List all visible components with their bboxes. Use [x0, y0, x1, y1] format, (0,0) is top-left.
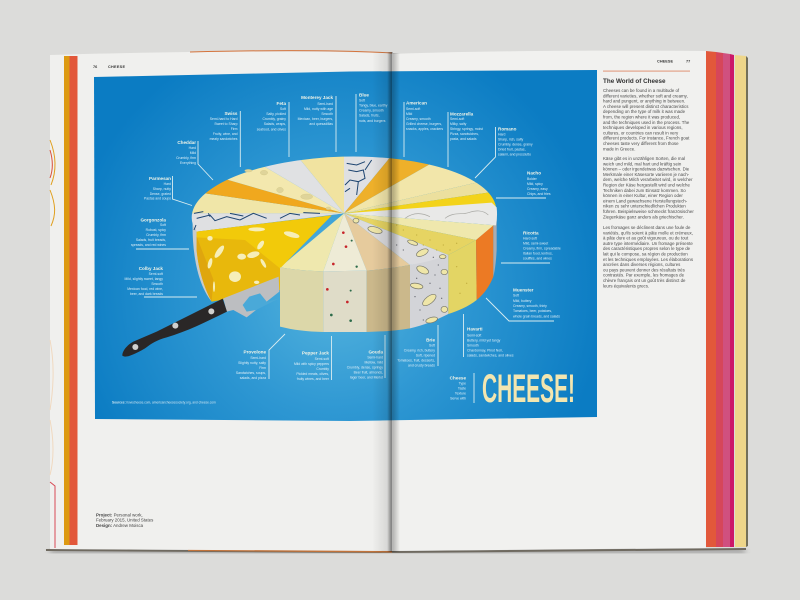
- label: Swiss: meaty sandwiches: [210, 137, 238, 141]
- label: Swiss: Firm: [231, 127, 238, 131]
- article text: French: contrastés. Par exemple, les fromages de: [603, 273, 685, 278]
- article text: German: Region der Käse hergestellt wird und welche: [603, 182, 690, 188]
- article text: French: autre type intermédiaire. Un fromage présente: [603, 241, 693, 246]
- article text: French: chèvre français ont un goût très distinct de: [603, 278, 686, 283]
- label: American: Creamy, smooth: [406, 117, 431, 121]
- label: Gouda: Crumbly, dense, springy: [347, 366, 383, 370]
- label: American: Semi-soft: [406, 107, 420, 111]
- label: Swiss: Swiss: [224, 111, 238, 116]
- label: Ricotta: Mild, semi-sweet: [523, 242, 548, 246]
- side faces: [410, 217, 497, 328]
- label: Mozzarella: Stringy, springy, moist: [450, 127, 483, 131]
- label: Mozzarella: pasta, and salads: [450, 137, 477, 141]
- yellow wedge: [197, 215, 332, 302]
- label: Colby Jack: Mild, slightly sweet, tangy: [125, 277, 163, 281]
- headline CHEESE!: CHEESE!: [482, 367, 575, 411]
- article text: English: depending on the type of milk it was made: [603, 109, 686, 114]
- label: Cheddar: [176, 140, 213, 180]
- label: Nacho: Nacho: [527, 170, 541, 176]
- book edge: bottom: [46, 548, 746, 553]
- label: Colby Jack: [125, 266, 197, 297]
- brie ovals and speckles: [353, 218, 448, 324]
- label: Brie: and crusty breads: [408, 364, 435, 368]
- label: Parmesan: Sharp, nutty: [153, 187, 171, 191]
- label: Cheddar: Mild: [190, 151, 196, 155]
- label: Nacho: Bolder: [527, 177, 538, 181]
- label: Mozzarella: Pizza, sandwiches,: [450, 132, 479, 136]
- legend: Cheese key: Taste: [458, 386, 466, 390]
- article text: German: können in einer Kultur, einer Region oder: [603, 193, 683, 198]
- article text: French: lait qui le compose, sa région de production: [603, 252, 688, 256]
- label: Muenster: Muenster: [513, 288, 534, 292]
- label: Swiss: Semi-hard to Hard: [210, 117, 238, 121]
- label: Feta: Feta: [277, 101, 286, 106]
- article text: English: Cheeses can be found in a multitude of: [603, 88, 680, 93]
- label: Gouda: lager beer, and Merlot: [350, 376, 383, 380]
- article text: English: cheeses taste very different from those: [603, 141, 679, 146]
- swiss holes: [245, 169, 331, 210]
- label: Feta: Crumbly, grainy: [262, 117, 286, 121]
- grey squiggles: [405, 211, 488, 218]
- label: Havarti: Semi-soft: [467, 334, 481, 338]
- left page: [50, 52, 392, 551]
- article text: French: et les techniques employées. Les élaborations: [603, 257, 694, 262]
- label: Romano: Crumbly, dense, grainy: [498, 142, 533, 146]
- label: Swiss: Fruity, wine, and: [213, 132, 238, 136]
- running head left: [93, 65, 125, 69]
- article text: German: Ziegenkäse ganz anders als griechischer.: [603, 214, 684, 219]
- legend: Cheese key: Cheese: [450, 376, 466, 380]
- article text: French: leurs équivalents grecs.: [603, 283, 649, 288]
- article text: English: and the techniques used in the process. The: [603, 120, 690, 125]
- left rind: [193, 218, 213, 302]
- project credits: Andrew Moisca: [112, 523, 144, 528]
- label: Colby Jack: Smooth: [151, 282, 163, 286]
- label: American: Grilled cheese, burgers,: [406, 122, 442, 126]
- article text: German: niken zu sehr unterschiedlichen Produkten: [603, 204, 686, 209]
- blade cutouts: [243, 293, 279, 312]
- label: Feta: [257, 101, 289, 157]
- label: Colby Jack: Mexican food, red wine,: [127, 287, 163, 291]
- label: Brie: Brie: [426, 338, 435, 342]
- label: Feta: Salads, wraps,: [264, 122, 286, 126]
- blue veins: [194, 160, 372, 230]
- left page edge decoration: [50, 140, 55, 548]
- label: Gouda: [347, 335, 385, 380]
- label: Provolone: Firm: [259, 366, 266, 370]
- article text: English: cultures, or countries can result in very: [603, 130, 679, 135]
- label: Parmesan: Dense, grated: [150, 192, 171, 196]
- label: Mozzarella: Semi-soft: [450, 117, 464, 121]
- article text: French: Les fromages se déclinent dans une foule de: [603, 225, 691, 230]
- article text: English: A cheese will present distinct characteristics: [603, 104, 689, 109]
- label: Muenster: Tomatoes, beer, potatoes,: [513, 309, 552, 313]
- article text: German: führen. Beispielsweise schmeckt französischer: [603, 209, 694, 214]
- label: Brie: Soft: [429, 344, 435, 348]
- label: American: [404, 100, 443, 157]
- label: Blue: Salads, fruits,: [359, 114, 380, 118]
- label: Romano: salami, and prosciutto: [498, 152, 531, 156]
- label: Mozzarella: Milky, salty: [450, 122, 467, 126]
- article text: German: dem, welche Milch verarbeitet wird, in welcher: [603, 177, 693, 182]
- label: Romano: Hard: [498, 132, 505, 136]
- label: Ricotta: Creamy, firm, spreadable: [523, 246, 561, 250]
- label: Nacho: Creamy, easy: [527, 187, 548, 191]
- spine shadow left: [372, 52, 393, 552]
- label: American: Mild: [406, 112, 412, 116]
- label: Gorgonzola: Soft: [160, 223, 166, 227]
- book shadow: [50, 549, 745, 553]
- project credits: February 2015, United States: [96, 518, 154, 522]
- cheese wheel: [147, 140, 542, 332]
- label: Muenster: Soft: [513, 294, 519, 298]
- label: Cheddar: Crumbly, firm: [176, 156, 196, 160]
- label: Gouda: Semi-hard: [367, 356, 383, 360]
- label: Mozzarella: Mozzarella: [450, 112, 474, 116]
- label: Gorgonzola: Gorgonzola: [140, 218, 166, 222]
- pepper flecks: [326, 231, 349, 303]
- article text: German: einem Land gewachsene Herstellungstech-: [603, 198, 688, 203]
- label: Muenster: Mild, buttery: [513, 299, 532, 303]
- label: Monterey Jack: Smooth: [321, 112, 333, 116]
- label: Ricotta: Italian food, lentros,: [523, 252, 553, 256]
- label: Blue: [356, 92, 388, 152]
- label: Nacho: [496, 170, 551, 198]
- label: Monterey Jack: Mexican, beer, burgers,: [298, 117, 333, 121]
- label: Provolone: Semi-hard: [250, 356, 266, 360]
- article text: French: à pâte dure et au goût vigoureux, ou de tout: [603, 236, 689, 241]
- top edge accent: [190, 51, 392, 53]
- front right top slices: [280, 203, 497, 271]
- legend: Cheese key: [450, 373, 474, 403]
- label: Cheddar: Cheddar: [177, 140, 196, 145]
- label: Ricotta: [501, 230, 561, 263]
- article rule: [603, 70, 690, 72]
- legend: Cheese key: Serve with: [450, 396, 466, 400]
- article text: French: ancrées dans diverses régions, cultures: [603, 262, 681, 267]
- article text: English: hard and pungent, or anything in between.: [603, 99, 685, 104]
- label: Pepper Jack: Mild with spicy peppers: [294, 362, 329, 366]
- label: Havarti: [464, 314, 514, 358]
- label: Brie: Soft, ripened: [416, 354, 435, 358]
- label: Brie: Creamy, rich, buttery: [404, 348, 435, 352]
- running head right: [657, 60, 690, 64]
- label: Blue: Creamy, smooth: [359, 108, 384, 112]
- front wedge faces: [280, 265, 410, 332]
- label: Colby Jack: beer, and dark breads: [130, 292, 163, 296]
- label: Cheddar: Everything: [180, 161, 196, 165]
- rivets: [132, 308, 214, 350]
- knife: [122, 277, 279, 357]
- left page colour stripes: [64, 56, 78, 545]
- label: Colby Jack: Colby Jack: [139, 266, 163, 271]
- label: Blue: nuts, and burgers: [359, 119, 386, 123]
- label: Pepper Jack: [294, 336, 332, 381]
- article text: French: variétés, qu'ils soient à pâte molle et crémeux,: [603, 230, 693, 235]
- label: Monterey Jack: Semi-hard: [317, 102, 333, 106]
- project credits: Personal work,: [112, 512, 143, 518]
- right page: [392, 51, 706, 551]
- label: Pepper Jack: Crumbly: [316, 367, 329, 371]
- label: Feta: Salty, pickled: [266, 112, 286, 116]
- label: Pepper Jack: Pepper Jack: [302, 350, 329, 356]
- label: Provolone: Provolone: [244, 350, 266, 354]
- blade: [223, 277, 279, 317]
- label: Ricotta: Hard-soft: [523, 236, 537, 240]
- spine shadow right: [393, 53, 400, 552]
- label: Nacho: Mild, spicy: [527, 182, 543, 186]
- muenster dots: [396, 224, 467, 294]
- label: Havarti: Havarti: [467, 326, 483, 332]
- article text: English: different varieties, whether soft and creamy,: [603, 93, 688, 98]
- label: Gorgonzola: Salads, fruit breads,: [136, 238, 166, 242]
- label: Swiss: Sweet to Sharp: [214, 122, 238, 126]
- label: Muenster: whole grain breads, and salads: [513, 314, 560, 318]
- running head left: CHEESE: [108, 65, 125, 69]
- label: Nacho: Chips, and fries: [527, 192, 551, 196]
- label: Gorgonzola: Crumbly, firm: [146, 233, 166, 237]
- label: Blue: Soft: [359, 98, 365, 102]
- article text: French: ou pays peuvent donner des résultats très: [603, 267, 686, 272]
- label: Gorgonzola: spreads, and red wines: [131, 243, 166, 247]
- label: Parmesan: Parmesan: [149, 176, 171, 181]
- label: American: American: [406, 100, 427, 106]
- article text: German: Käse gibt es in unzähligen Sorten, die mal: [603, 156, 685, 161]
- article text: English: from, the region where it was produced,: [603, 114, 680, 120]
- label: Provolone: salads, and pizza: [240, 376, 266, 380]
- sources: Sources: ilovecheese.com, americancheesesociety.org, and cheese.com: [112, 400, 216, 404]
- label: Monterey Jack: Monterey Jack: [301, 95, 333, 100]
- article text: German: können – oder irgendetwas dazwischen. Die: [603, 167, 690, 172]
- article text: English: made in Greece.: [603, 146, 635, 151]
- label: Feta: Soft: [280, 107, 286, 111]
- label: Feta: seafood, and olives: [257, 128, 286, 132]
- label: Romano: Dried fruit, pastas,: [498, 148, 526, 152]
- label: Romano: Romano: [498, 126, 517, 132]
- label: Parmesan: [144, 176, 192, 206]
- article text: English: techniques developed in various regions,: [603, 125, 683, 130]
- label: Mozzarella: [448, 112, 483, 167]
- label: American: snacks, apples, crackers: [406, 127, 443, 131]
- label: Muenster: Creamy, smooth, thirty: [513, 304, 547, 308]
- legend: Cheese key: Type: [459, 382, 466, 386]
- label: Colby Jack: Semi-soft: [149, 272, 163, 276]
- label: Havarti: Chardonnay, Pinot Noir,: [467, 348, 503, 352]
- article text: German: weich und mild, mal hart und kräftig sein: [603, 161, 682, 166]
- label: Parmesan: Hard: [164, 182, 171, 186]
- label: Romano: Sharp, rich, salty: [498, 138, 524, 142]
- right page colour stripes: [706, 51, 748, 547]
- label: Provolone: Slightly nutty, salty: [238, 361, 266, 365]
- label: Swiss: [210, 111, 240, 167]
- label: Muenster: [486, 288, 560, 321]
- label: Havarti: salads, sandwiches, and olives: [467, 354, 514, 358]
- running head right: 77: [686, 60, 690, 64]
- label: Brie: Tomatoes, fruit, desserts,: [397, 358, 435, 362]
- label: Cheddar: Hard: [189, 146, 196, 150]
- green flecks: [330, 240, 358, 322]
- label: Havarti: Smooth: [467, 344, 479, 348]
- blue infographic panel: [94, 70, 597, 421]
- back slices: [192, 156, 496, 228]
- label: Brie: [397, 325, 438, 368]
- article text: German: Techniken dabei zum Einsatz kommen. So: [603, 188, 686, 193]
- project credits: Project:: [96, 512, 113, 518]
- label: Gouda: Beer fruit, almonds,: [354, 370, 383, 374]
- legend: Cheese key: Texture: [455, 392, 466, 396]
- label: Gouda: Mellow, mild: [365, 360, 383, 364]
- label: Blue: Tangy, blue, earthy: [359, 104, 388, 108]
- running head right: CHEESE: [657, 60, 673, 64]
- project credits: Design:: [96, 523, 113, 528]
- label: Monterey Jack: and quesadillas: [309, 122, 333, 126]
- label: Pepper Jack: Pickled meats, olives,: [296, 372, 329, 376]
- label: Monterey Jack: [298, 95, 336, 152]
- label: Gorgonzola: [131, 218, 189, 249]
- handle: [122, 299, 227, 357]
- running head left: 76: [93, 65, 97, 69]
- label: Monterey Jack: Mild, nutty with age: [304, 107, 333, 111]
- label: Pepper Jack: Semi-soft: [315, 357, 329, 361]
- label: Pepper Jack: fruity wines, and beer: [297, 377, 330, 381]
- label: Havarti: Buttery, mild yet tangy: [467, 338, 501, 342]
- article title: The World of Cheese: [603, 78, 666, 85]
- label: Gouda: Gouda: [368, 350, 383, 354]
- article text: English: different products. For instance, French goat: [603, 136, 690, 141]
- article text: German: Merkmale einer Käsesorte variieren je nach-: [603, 172, 690, 177]
- label: Parmesan: Pastas and soups: [144, 196, 171, 200]
- label: Blue: Blue: [359, 92, 369, 98]
- label: Ricotta: soufflés, and wines: [523, 256, 552, 260]
- label: Provolone: Sandwiches, soups,: [236, 371, 266, 375]
- left edge fill for gorgonzola slice: [193, 213, 344, 232]
- label: Romano: [475, 126, 533, 178]
- label: Ricotta: Ricotta: [523, 230, 539, 236]
- article text: French: des caractéristiques propres selon le type de: [603, 246, 691, 251]
- label: Provolone: [236, 334, 285, 380]
- label: Gorgonzola: Robust, spicy: [146, 228, 166, 232]
